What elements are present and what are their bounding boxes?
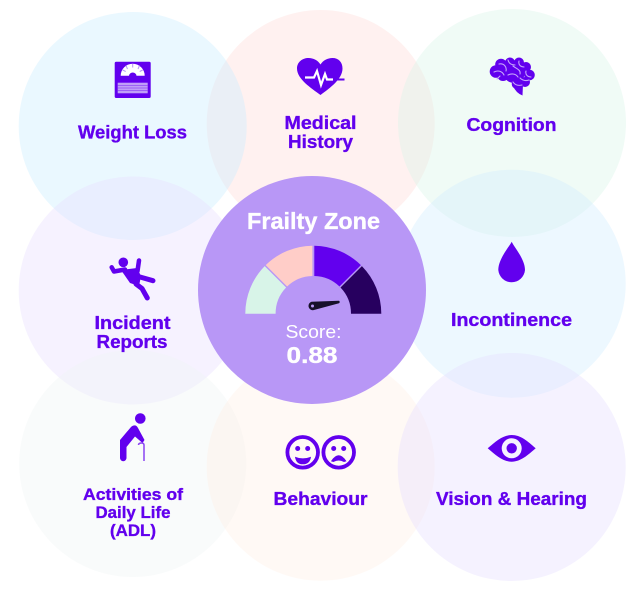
item: vision and hearing — [436, 435, 587, 509]
label: Cognition — [466, 114, 556, 135]
score value: 0.88 — [286, 342, 338, 368]
icon: sad face — [323, 437, 354, 468]
icon: falling person — [112, 258, 153, 298]
icon: water drop — [498, 242, 525, 282]
heading: Frailty Zone: Frailty Zone — [247, 208, 380, 234]
label: Medical — [284, 112, 356, 133]
label: Vision & Hearing — [436, 488, 587, 509]
icon: weighing scale — [115, 62, 151, 98]
item: cognition — [466, 58, 556, 135]
item: weight loss — [78, 62, 187, 143]
center panel: frailty zone — [198, 176, 426, 404]
icon: eye — [488, 435, 536, 462]
icon: brain — [490, 58, 535, 96]
item: incident reports — [94, 258, 170, 352]
item: activities of daily life: Daily Life — [96, 503, 170, 522]
label: Incident — [94, 312, 170, 333]
item: medical history: History — [288, 131, 354, 152]
item: medical history — [284, 58, 356, 152]
label: Behaviour — [274, 488, 368, 509]
gauge needle — [308, 301, 340, 310]
label: Incontinence — [451, 309, 572, 330]
gauge — [245, 246, 381, 314]
item: incident reports: Reports — [96, 331, 168, 352]
score label: Score: — [286, 321, 342, 342]
icon: elderly person with cane — [120, 413, 146, 461]
label: Weight Loss — [78, 122, 187, 142]
item: incontinence — [451, 242, 572, 330]
item: behaviour — [274, 437, 368, 509]
label: Activities of — [83, 485, 183, 504]
icon: happy face — [287, 437, 318, 468]
item: activities of daily life — [83, 413, 183, 540]
item: activities of daily life: (ADL) — [110, 521, 156, 540]
icon: heart with pulse — [297, 58, 344, 95]
